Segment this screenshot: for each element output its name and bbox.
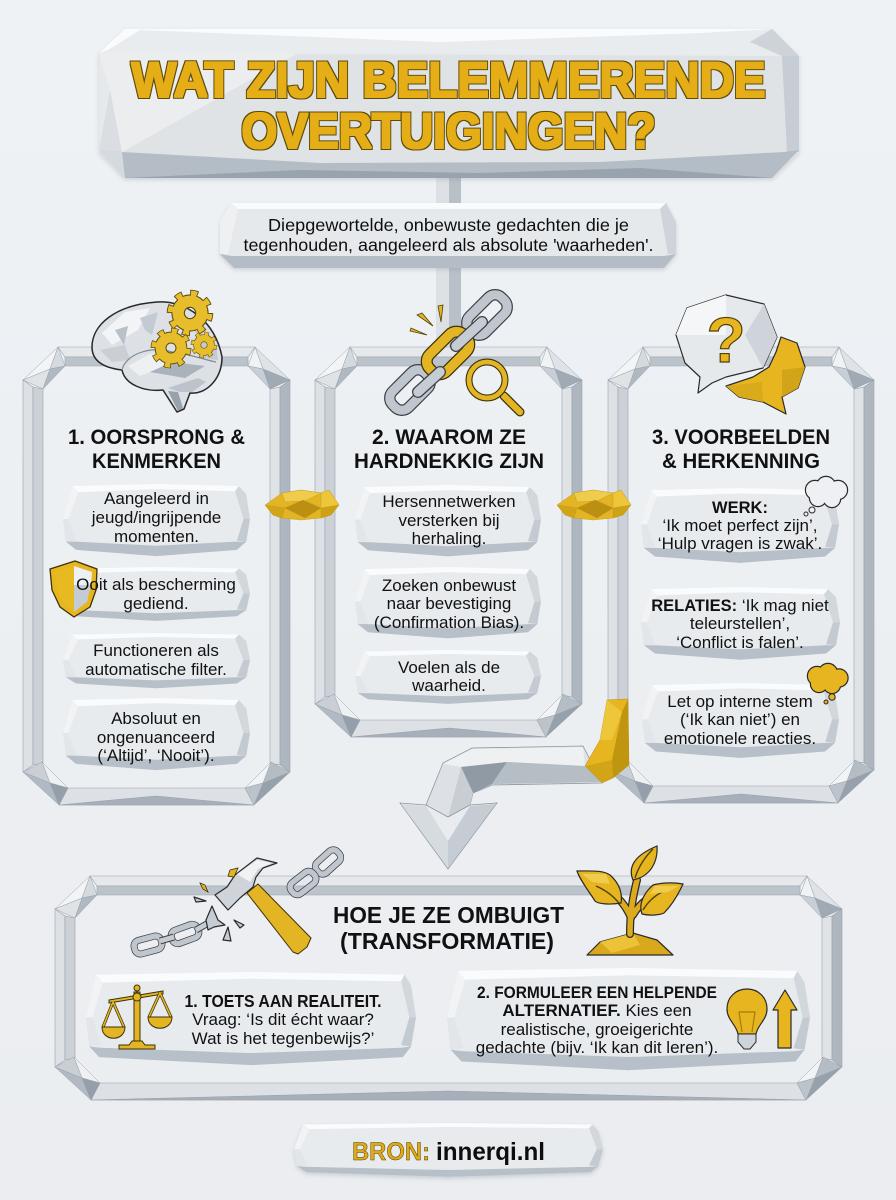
panel 2 heading: HARDNEKKIG ZIJN <box>354 450 544 473</box>
source plaque: BRON: <box>352 1138 430 1166</box>
panel 3 item: interne stem: (‘Ik kan niet’) en <box>680 710 800 729</box>
connector stem <box>436 176 461 352</box>
step 2: formuleer alternatief <box>447 968 810 1070</box>
step 1: toets aan realiteit: 1. TOETS AAN REALITEIT. <box>184 991 382 1011</box>
icon: speech bubbles with question mark <box>676 295 805 414</box>
panel 1 item: aangeleerd: jeugd/ingrijpende <box>91 508 221 527</box>
gold connector: panel 2 to 3 <box>557 490 631 520</box>
panel 3 item: relaties <box>641 587 840 660</box>
panel 1 item: bescherming: gediend. <box>123 594 189 613</box>
panel 3 item: relaties: teleurstellen’, <box>690 614 790 633</box>
panel 3 item: relaties: RELATIES: ‘Ik mag niet <box>651 596 829 615</box>
source plaque <box>294 1123 603 1177</box>
panel 1 item: bescherming: Ooit als bescherming <box>76 575 236 594</box>
panel 1 item: filter: automatische filter. <box>85 660 227 679</box>
panel 3 item: werk: ‘Ik moet perfect zijn’, <box>663 516 817 535</box>
panel 3 item: interne stem <box>642 683 839 758</box>
panel 3 frame <box>608 347 874 803</box>
step 2: formuleer alternatief: 2. FORMULEER EEN HELPENDE <box>477 983 717 1002</box>
panel 2 item: bevestiging <box>355 567 541 638</box>
title plaque <box>99 29 799 178</box>
title <box>132 52 766 159</box>
panel 3 item: interne stem: Let op interne stem <box>667 692 813 711</box>
panel 1 frame <box>23 347 290 805</box>
panel 1 item: absoluut: Absoluut en <box>111 709 201 728</box>
panel 3 heading: 3. VOORBEELDEN <box>652 426 830 449</box>
panel 1 item: aangeleerd: momenten. <box>114 527 199 546</box>
panel 2 item: bevestiging: Zoeken onbewust <box>382 576 516 595</box>
panel 1 item: aangeleerd: Aangeleerd in <box>104 489 209 508</box>
title: OVERTUIGINGEN? <box>242 103 656 159</box>
icon: hammer breaking chain <box>133 848 343 955</box>
icon: balance scale <box>102 985 172 1049</box>
panel 1 item: aangeleerd <box>63 484 250 556</box>
panel 1 item: absoluut: (‘Altijd’, ‘Nooit’). <box>97 746 215 765</box>
panel 3 item: werk <box>641 488 839 563</box>
panel 2 item: waarheid: waarheid. <box>411 676 486 695</box>
panel 2 item: hersennetwerken <box>355 485 541 556</box>
panel 3 heading <box>652 426 830 473</box>
step 1: toets aan realiteit <box>86 972 416 1065</box>
step 1: toets aan realiteit: Wat is het tegenbewijs?’ <box>192 1029 374 1048</box>
panel 2 heading <box>354 426 544 473</box>
panel 4 heading: HOE JE ZE OMBUIGT <box>333 902 564 928</box>
panel 4 frame <box>55 876 842 1100</box>
panel 3 item: relaties: ‘Conflict is falen’. <box>676 633 804 652</box>
icon: speech bubbles with question mark: ? <box>706 304 746 376</box>
panel 3 heading: & HERKENNING <box>662 450 820 473</box>
subtitle plaque <box>220 203 676 268</box>
panel 2 heading: 2. WAAROM ZE <box>372 426 526 449</box>
subtitle plaque: tegenhouden, aangeleerd als absolute 'waarheden'. <box>244 235 654 255</box>
title: WAT ZIJN BELEMMERENDE <box>132 52 766 108</box>
icon: chain with magnifier <box>386 291 520 414</box>
panel 3 item: werk: WERK: <box>712 499 768 517</box>
panel 1 heading: KENMERKEN <box>92 450 221 473</box>
icon: brain with gears <box>92 294 222 412</box>
panel 1 heading: 1. OORSPRONG & <box>68 426 245 449</box>
arrow: from panels down to transformation <box>400 699 629 869</box>
icon: thought cloud white <box>804 477 847 516</box>
panel 2 item: bevestiging: (Confirmation Bias). <box>374 613 524 632</box>
step 1: toets aan realiteit: Vraag: ‘Is dit écht waar? <box>192 1010 374 1029</box>
panel 2 item: waarheid: Voelen als de <box>398 658 500 677</box>
icon: thought cloud gold <box>808 664 848 704</box>
step 2: formuleer alternatief: realistische, groeigerichte <box>501 1020 693 1039</box>
panel 2 item: waarheid <box>355 650 541 704</box>
panel 1 item: absoluut: ongenuanceerd <box>97 728 215 747</box>
icon: growing plant <box>577 846 683 955</box>
gold connector: panel 1 to 2 <box>265 490 339 520</box>
panel 1 heading <box>68 426 245 473</box>
panel 2 item: hersennetwerken: Hersennetwerken <box>382 492 516 511</box>
step 2: formuleer alternatief: ALTERNATIEF. Kies een <box>502 1001 692 1020</box>
panel 2 item: hersennetwerken: herhaling. <box>412 529 486 548</box>
panel 1 item: bescherming <box>50 561 250 621</box>
panel 3 item: werk: ‘Hulp vragen is zwak’. <box>658 534 822 553</box>
source plaque: innerqi.nl <box>436 1138 545 1166</box>
panel 4 heading <box>333 902 564 954</box>
panel 4 heading: (TRANSFORMATIE) <box>340 928 554 954</box>
panel 1 item: absoluut <box>63 698 250 770</box>
panel 3 item: interne stem: emotionele reacties. <box>664 729 816 748</box>
panel 2 frame <box>315 347 582 737</box>
panel 2 item: bevestiging: naar bevestiging <box>387 594 511 613</box>
step 2: formuleer alternatief: gedachte (bijv. ‘Ik kan dit leren’). <box>476 1038 718 1057</box>
icon: up arrow <box>773 990 797 1048</box>
panel 1 item: filter <box>63 633 250 688</box>
panel 1 item: filter: Functioneren als <box>93 641 219 660</box>
panel 2 item: hersennetwerken: versterken bij <box>398 511 500 530</box>
subtitle plaque: Diepgewortelde, onbewuste gedachten die je <box>268 215 629 235</box>
icon: light bulb <box>727 989 767 1049</box>
